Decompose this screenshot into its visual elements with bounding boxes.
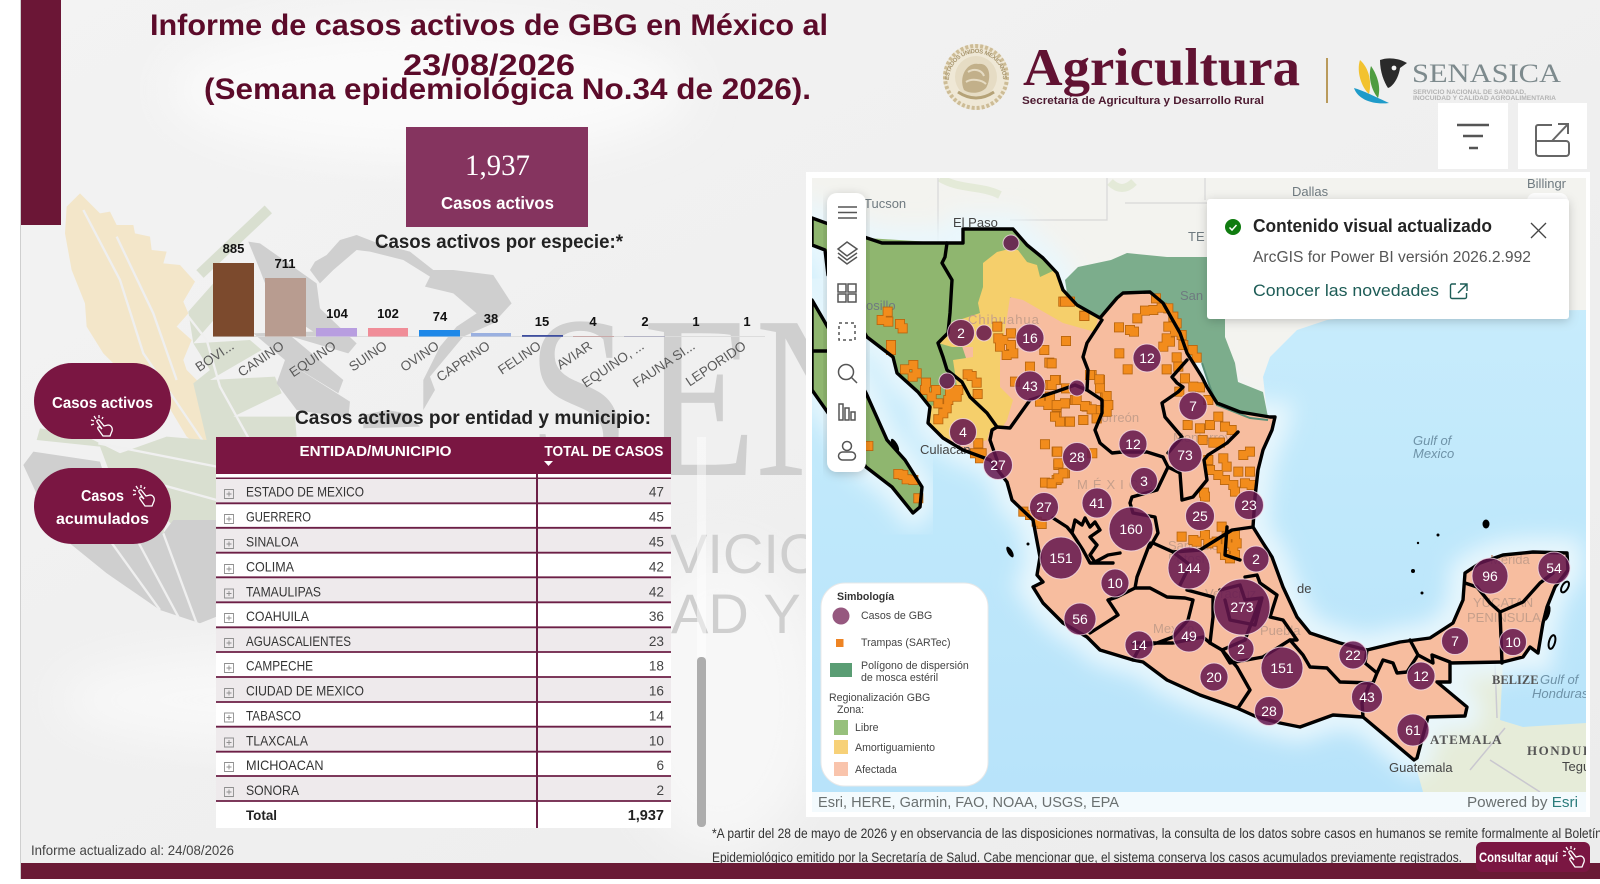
subtitle <box>1413 90 1557 102</box>
map labels: Torreón <box>1095 410 1139 425</box>
icon: selection <box>839 323 855 340</box>
legend: zone heading <box>829 692 930 716</box>
footnote <box>712 826 1600 865</box>
cluster: 25 <box>1186 502 1214 530</box>
row: CAMPECHE: 18 <box>649 659 664 674</box>
watermark: eagle emblem <box>23 193 512 623</box>
icon: close <box>1531 223 1546 238</box>
row: COLIMA <box>246 559 664 575</box>
row: Total: 1,937 <box>628 808 664 824</box>
cluster: 28: 28 <box>1069 449 1085 465</box>
cluster: 144: 144 <box>1177 560 1201 576</box>
row: MICHOACAN: MICHOACAN <box>246 757 324 773</box>
bar: AVIAR: 4 <box>589 314 597 329</box>
row: SONORA <box>246 782 664 798</box>
bar: SUINO: 102 <box>377 306 399 321</box>
legend: buffer zone: Amortiguamiento <box>855 742 935 754</box>
footnote: Epidemiológico emitido por la Secretaría de Salud. Cabe mencionar que, el sistema conserva los casos acumulados previamente registrados. <box>712 850 1462 865</box>
map zone: affected <box>948 294 1566 758</box>
cluster: 49: 49 <box>1181 628 1197 644</box>
row: SINALOA: 45 <box>649 535 664 550</box>
row: TABASCO: TABASCO <box>246 707 301 723</box>
subtitle: INOCUIDAD Y CALIDAD AGROALIMENTARIA <box>1413 96 1557 102</box>
logo: Agricultura <box>943 39 1300 110</box>
row: COLIMA: COLIMA <box>246 559 295 575</box>
cluster: 73: 73 <box>1177 447 1193 463</box>
cluster: 23 <box>1234 490 1264 520</box>
cluster: 10: 10 <box>1107 575 1123 591</box>
cluster: 28 <box>1254 696 1284 726</box>
cluster: 3: 3 <box>1140 473 1148 489</box>
map labels: Mérida <box>1490 552 1531 567</box>
icon: cow, corn and fish <box>1354 58 1407 103</box>
bar: FELINO: 15 <box>535 314 549 329</box>
map labels: Tucson <box>864 196 906 211</box>
update date: Informe actualizado al: 24/08/2026 <box>31 842 234 858</box>
icon: success check <box>1225 219 1241 235</box>
bar: CANINO <box>235 256 306 380</box>
map labels: Gulf of <box>1413 433 1453 448</box>
cluster: 27 <box>1030 492 1058 522</box>
map labels: Puebla <box>1260 623 1301 638</box>
row: TABASCO <box>246 707 664 723</box>
title: Informe de casos activos de GBG en México al <box>150 9 828 42</box>
icon: basemap gallery <box>838 284 856 302</box>
map labels: El Paso <box>953 215 998 230</box>
bar: EQUINO, ...: EQUINO, ... <box>579 338 647 390</box>
bar: EQUINO <box>286 306 357 380</box>
cluster: 54 <box>1538 552 1570 584</box>
legend: buffer zone <box>834 740 935 754</box>
cluster: 73 <box>1168 438 1202 472</box>
row: ESTADO DE MEXICO: ESTADO DE MEXICO <box>246 484 364 500</box>
subtitle: SERVICIO NACIONAL DE SANIDAD, <box>1413 90 1526 96</box>
expand icons <box>224 490 234 796</box>
map legend <box>821 583 988 786</box>
title: (Semana epidemiológica No.34 de 2026). <box>204 73 811 106</box>
cluster: 2: 2 <box>1237 641 1245 657</box>
attribution bar: Powered by Esri <box>1467 795 1578 811</box>
bar: BOVINO <box>192 241 254 375</box>
cluster: 56 <box>1064 603 1096 635</box>
row: GUERRERO: GUERRERO <box>246 509 311 525</box>
notification body: ArcGIS for Power BI versión 2026.2.992 <box>1253 249 1531 266</box>
row: AGUASCALIENTES <box>246 633 664 649</box>
title: 23/08/2026 <box>403 49 575 82</box>
row: SINALOA <box>246 534 664 550</box>
cluster: 96 <box>1472 558 1508 594</box>
bar: LEPORIDO <box>683 314 751 389</box>
map labels: ATEMALA <box>1430 732 1502 747</box>
table header: ENTIDAD/MUNICIPIO <box>300 444 452 460</box>
cluster: 151: 151 <box>1270 660 1294 676</box>
bar: SUINO: SUINO <box>346 338 390 374</box>
row: MICHOACAN: 6 <box>656 758 664 773</box>
footer bar <box>0 863 1600 884</box>
row: COAHUILA: 36 <box>649 609 664 624</box>
cluster: 10: 10 <box>1505 634 1521 650</box>
watermark: SEN lettering: VICIO <box>670 522 822 585</box>
cluster: 12: 12 <box>1139 350 1155 366</box>
row: GUERRERO: 45 <box>649 510 664 525</box>
cluster: 61 <box>1397 714 1429 746</box>
bar: FAUNA SI... <box>630 314 700 390</box>
watermark: SEN lettering: S <box>527 270 630 526</box>
row: SONORA: SONORA <box>246 782 300 798</box>
cluster: 151 <box>1040 537 1082 579</box>
bar: AVIAR <box>554 314 614 372</box>
bar: BOVINO: BOVI... <box>192 338 237 375</box>
attribution bar: Esri, HERE, Garmin, FAO, NOAA, USGS, EPA <box>818 795 1119 811</box>
cluster: 12: 12 <box>1413 668 1429 684</box>
map labels: Veracruz <box>1205 586 1256 601</box>
row: Total: Total <box>246 807 277 823</box>
heading: cases by state and municipality: Casos activos por entidad y municipio: <box>295 407 651 429</box>
row: TAMAULIPAS: 42 <box>649 584 664 599</box>
bar: LEPORIDO: 1 <box>743 314 751 329</box>
cluster: 43: 43 <box>1022 378 1038 394</box>
logo: SENASICA <box>1354 58 1561 103</box>
cluster: 273: 273 <box>1230 599 1254 615</box>
bar: FELINO <box>495 314 563 378</box>
cluster: 2 <box>948 320 974 346</box>
row: GUERRERO <box>246 509 664 525</box>
map panel <box>806 172 1600 817</box>
notification link: Conocer las novedades <box>1253 281 1439 300</box>
row: TAMAULIPAS <box>246 583 664 599</box>
cluster: 41: 41 <box>1089 495 1105 511</box>
logo divider <box>1326 58 1328 103</box>
cluster: 20: 20 <box>1206 669 1222 685</box>
table: cases by state <box>216 437 671 828</box>
cluster: 12 <box>1119 430 1147 458</box>
cluster: 160: 160 <box>1119 521 1143 537</box>
table scrollbar <box>697 437 706 827</box>
map labels: YUCATAN <box>1473 595 1533 610</box>
legend: cases: Casos de GBG <box>861 610 932 622</box>
cluster: 160 <box>1109 507 1153 551</box>
map labels: Dallas <box>1292 184 1329 199</box>
map labels: Culiacán <box>920 442 971 457</box>
map labels: de <box>1297 581 1311 596</box>
button: Casos acumulados: Casos <box>81 488 124 505</box>
bar: EQUINO, ... <box>579 314 665 390</box>
cluster: 61: 61 <box>1405 722 1421 738</box>
legend: affected zone <box>834 762 897 776</box>
row: CIUDAD DE MEXICO: CIUDAD DE MEXICO <box>246 683 364 699</box>
map labels: BELIZE <box>1492 673 1539 687</box>
map: case clusters <box>939 235 1570 746</box>
cluster: 2 <box>1228 636 1254 662</box>
notification title: Contenido visual actualizado <box>1253 216 1492 236</box>
bar: CAPRINO <box>434 311 511 385</box>
bar: SUINO <box>346 306 408 374</box>
row: SINALOA: SINALOA <box>246 534 299 550</box>
button: Consultar aquí <box>1476 842 1590 872</box>
table header <box>216 437 671 474</box>
cluster: 2 <box>1243 546 1269 572</box>
legend: sterile fly polygon: de mosca estéril <box>861 672 938 684</box>
cluster: 12: 12 <box>1125 436 1141 452</box>
cluster: 10 <box>1101 569 1129 597</box>
map labels: TE <box>1188 229 1205 244</box>
icon: layers <box>838 242 857 264</box>
legend: affected zone: Afectada <box>855 764 897 776</box>
row: TLAXCALA <box>246 732 664 748</box>
bar: OVINO: 74 <box>433 309 448 324</box>
row: ESTADO DE MEXICO <box>246 484 664 500</box>
bar: AVIAR: AVIAR <box>554 338 595 372</box>
cluster: 4 <box>950 418 976 446</box>
KPI label: Casos activos <box>441 193 554 213</box>
watermark: SEN lettering: AD Y <box>671 582 801 645</box>
icon: national seal: ESTADOS UNIDOS MEXICANOS <box>944 48 1007 80</box>
cluster: 12 <box>1133 344 1161 372</box>
map toolbar <box>827 193 866 472</box>
cluster: 7 <box>1442 628 1468 654</box>
map labels <box>864 176 1600 775</box>
map: trap squares <box>868 298 1252 558</box>
cluster: 7 <box>1179 392 1207 420</box>
map labels: San Luis <box>1168 538 1219 553</box>
cluster: 12 <box>1407 662 1435 690</box>
icon: analytics <box>839 404 855 420</box>
button: Casos activos <box>34 363 171 439</box>
cluster: 22 <box>1339 641 1367 669</box>
cluster: 151 <box>1261 647 1303 689</box>
row: CAMPECHE <box>246 658 664 674</box>
map zone: free <box>812 218 1063 407</box>
map labels: San <box>1180 288 1203 303</box>
legend: cases <box>832 608 932 624</box>
button: Consultar aquí: Consultar aquí <box>1479 850 1559 865</box>
bar: LEPORIDO: LEPORIDO <box>683 338 749 389</box>
wordmark: Agricultura <box>1023 39 1300 97</box>
bar: FAUNA SI...: 1 <box>692 314 700 329</box>
cluster: 7: 7 <box>1451 633 1459 649</box>
row: COAHUILA: COAHUILA <box>246 608 310 624</box>
row: ESTADO DE MEXICO: 47 <box>649 485 664 500</box>
row: Total <box>246 807 664 824</box>
map labels: Mexico <box>1413 446 1454 461</box>
wordmark: SENASICA <box>1412 59 1561 88</box>
map labels: Monterrey <box>1173 430 1232 445</box>
cluster: 4: 4 <box>959 424 967 440</box>
cluster: 14 <box>1125 631 1153 659</box>
bar: CAPRINO: 38 <box>484 311 498 326</box>
row: SONORA: 2 <box>656 783 664 798</box>
legend: free zone <box>834 720 879 735</box>
KPI card: active cases <box>406 127 588 227</box>
title <box>150 9 828 106</box>
row: TABASCO: 14 <box>649 708 664 723</box>
watermark: SEN lettering: N <box>755 270 889 526</box>
map: islands <box>889 438 1571 650</box>
cluster: 22: 22 <box>1345 647 1361 663</box>
map: state borders <box>812 218 1568 760</box>
row: COLIMA: 42 <box>649 560 664 575</box>
row: TAMAULIPAS: TAMAULIPAS <box>246 583 321 599</box>
button: Casos acumulados <box>34 468 171 544</box>
watermark: SEN lettering: E <box>643 270 756 526</box>
map <box>812 176 1600 792</box>
legend: sterile fly polygon: Polígono de dispersión <box>861 660 969 672</box>
cluster: 151: 151 <box>1049 550 1073 566</box>
cluster: 43 <box>1015 371 1045 401</box>
icon: external link <box>1450 284 1467 298</box>
row: MICHOACAN <box>246 757 664 773</box>
map labels: Billingr <box>1527 176 1567 191</box>
map labels: Guatemala <box>1389 760 1453 775</box>
cluster: 27: 27 <box>1036 499 1052 515</box>
map legend: Simbología <box>837 591 894 603</box>
notification card <box>1207 199 1569 319</box>
map labels: Chihuahua <box>968 312 1040 327</box>
cluster: 96: 96 <box>1482 568 1498 584</box>
bar: EQUINO: 104 <box>326 306 349 321</box>
table header: TOTAL DE CASOS <box>544 444 664 460</box>
bar: FELINO: FELINO <box>495 338 544 378</box>
legend: zone heading: Regionalización GBG <box>829 692 930 704</box>
bar: CANINO: 711 <box>275 256 295 271</box>
map labels: Potosí <box>1168 551 1205 566</box>
icon: menu <box>838 207 857 218</box>
map labels: Mexico <box>1153 621 1194 636</box>
cluster: 56: 56 <box>1072 611 1088 627</box>
cluster: 43 <box>1352 682 1382 712</box>
legend: traps: Trampas (SARTec) <box>861 637 950 649</box>
cluster: 2: 2 <box>1252 551 1260 567</box>
bar: OVINO <box>398 309 460 375</box>
bar: BOVINO: 885 <box>223 241 244 256</box>
map labels: Gulf of <box>1540 672 1580 687</box>
cluster: 10 <box>1500 628 1526 656</box>
bar: CAPRINO: CAPRINO <box>434 338 493 385</box>
KPI value: 1,937 <box>465 149 530 182</box>
map zone: sterile-fly polygon <box>1065 253 1268 427</box>
icon: user <box>838 442 856 460</box>
cluster: 27 <box>984 450 1012 480</box>
cluster: 16 <box>1016 324 1044 352</box>
expand button <box>1518 103 1587 169</box>
bar chart: cases by species <box>192 241 765 390</box>
row: AGUASCALIENTES: AGUASCALIENTES <box>246 633 351 649</box>
heading: cases by species: Casos activos por especie:* <box>375 231 623 253</box>
row: CAMPECHE: CAMPECHE <box>246 658 313 674</box>
cluster: 2: 2 <box>957 325 965 341</box>
legend: sterile fly polygon <box>830 660 969 684</box>
cluster: 28 <box>1062 442 1092 472</box>
watermark: SEN lettering <box>527 270 889 645</box>
cluster: 23: 23 <box>1241 497 1257 513</box>
row: CIUDAD DE MEXICO: 16 <box>649 684 664 699</box>
row: TLAXCALA: TLAXCALA <box>246 732 309 748</box>
button: Casos activos: Casos activos <box>52 395 153 412</box>
bar: EQUINO: EQUINO <box>286 338 339 380</box>
filter button <box>1438 103 1508 169</box>
legend: free zone: Libre <box>855 722 879 734</box>
cluster: 14: 14 <box>1131 637 1147 653</box>
row: AGUASCALIENTES: 23 <box>649 634 664 649</box>
map zone: buffer <box>928 250 1098 443</box>
cluster: 41 <box>1082 488 1112 518</box>
button: Casos acumulados: acumulados <box>56 511 149 528</box>
map labels: PENINSULA <box>1467 610 1541 625</box>
cluster: 49 <box>1173 620 1205 652</box>
row: CIUDAD DE MEXICO <box>246 683 664 699</box>
cluster: 144 <box>1168 547 1210 589</box>
icon: national seal <box>943 44 1009 110</box>
map labels: Honduras <box>1532 686 1589 701</box>
bar: EQUINO, ...: 2 <box>641 314 649 329</box>
cluster: 3 <box>1130 468 1158 494</box>
map labels: osillo <box>866 298 896 313</box>
cluster: 20 <box>1200 663 1228 691</box>
cluster: 27: 27 <box>990 457 1006 473</box>
bar: CANINO: CANINO <box>235 338 287 380</box>
row: TLAXCALA: 10 <box>649 733 664 748</box>
cluster: 25: 25 <box>1192 508 1208 524</box>
attribution bar <box>812 792 1586 812</box>
icon: search <box>838 364 857 383</box>
bar: FAUNA SI...: FAUNA SI... <box>630 338 698 390</box>
subtitle: Secretaría de Agricultura y Desarrollo Rural <box>1022 95 1264 107</box>
cluster: 43: 43 <box>1359 689 1375 705</box>
row: COAHUILA <box>246 608 664 624</box>
cluster: 16: 16 <box>1022 330 1038 346</box>
top-left accent block <box>21 0 61 225</box>
cluster: 54: 54 <box>1546 560 1562 576</box>
cluster: 7: 7 <box>1189 398 1197 414</box>
cluster: 28: 28 <box>1261 703 1277 719</box>
bar: OVINO: OVINO <box>398 338 442 375</box>
map labels: MÉXICO <box>1077 477 1158 492</box>
cluster: 273 <box>1214 579 1270 635</box>
legend: zone heading: Zona: <box>837 704 864 716</box>
